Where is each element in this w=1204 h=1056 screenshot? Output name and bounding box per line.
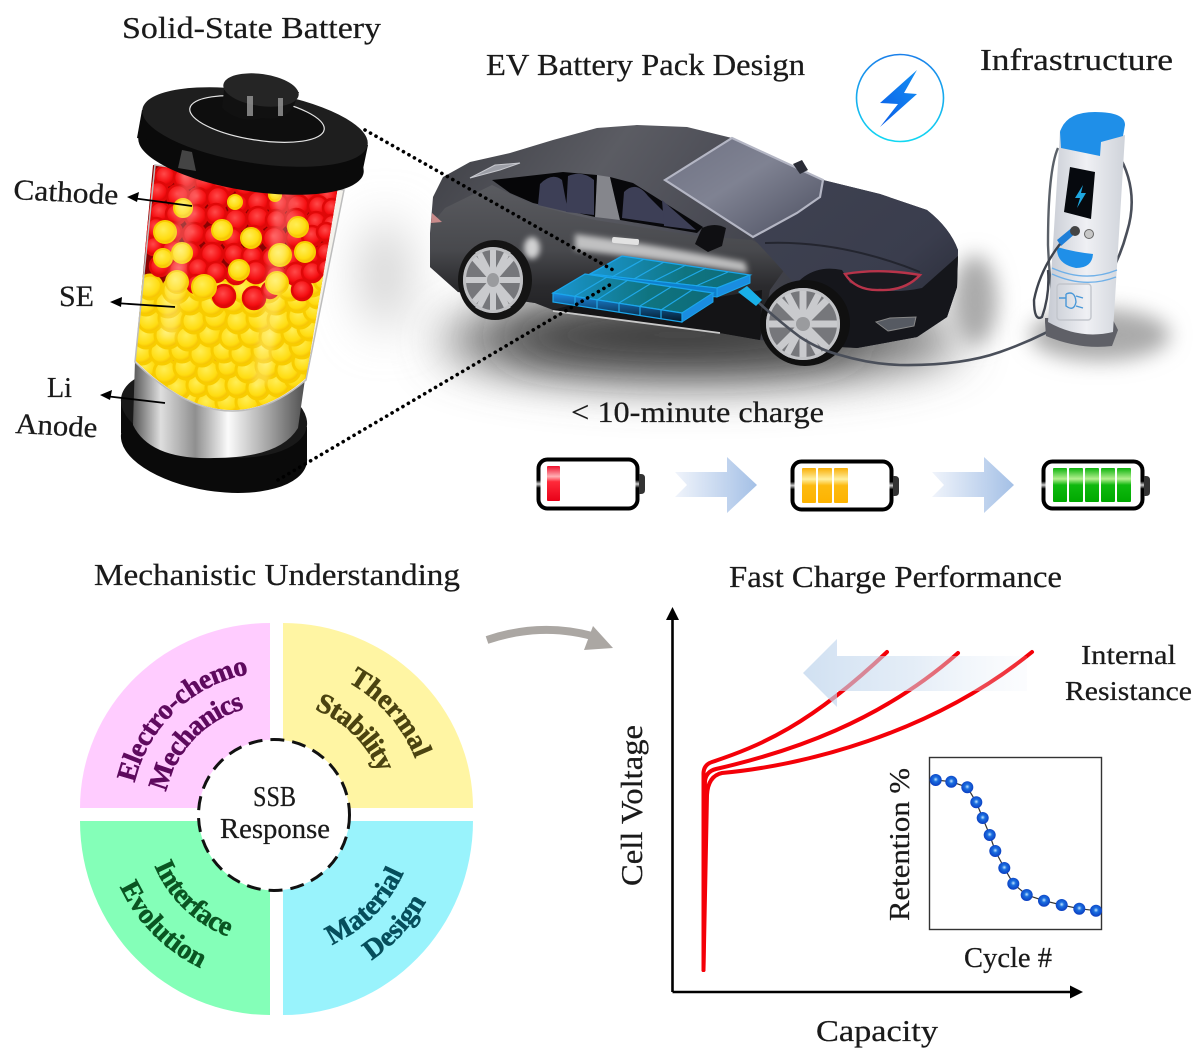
front wheel xyxy=(760,280,850,366)
hood and fender xyxy=(752,180,958,348)
bottom cap xyxy=(114,354,314,505)
label: cathode xyxy=(13,174,192,211)
front nose xyxy=(785,256,958,348)
solid electrolyte particles xyxy=(136,268,324,410)
dotted line: bottom zoom guide xyxy=(278,283,613,480)
headlight xyxy=(845,271,920,290)
B pillar xyxy=(595,175,620,220)
car silhouette and roof xyxy=(430,125,958,348)
inset chart: retention xyxy=(885,758,1102,974)
glass tube xyxy=(135,165,344,411)
title: EV battery pack design: EV Battery Pack Design xyxy=(486,47,806,82)
heading: fast charge performance: Fast Charge Performance xyxy=(729,559,1062,594)
segment: interface evolution xyxy=(80,821,270,1015)
chart axes xyxy=(666,607,1083,998)
icon: lightning badge xyxy=(856,54,944,142)
segment: material design: Design xyxy=(360,897,426,961)
label: Li anode: Li xyxy=(47,372,72,404)
door highlight xyxy=(575,234,748,273)
rear cable loop xyxy=(1048,148,1058,300)
icon: battery pack xyxy=(553,256,750,322)
lower door black panel xyxy=(553,290,762,340)
wing mirror xyxy=(695,225,726,252)
hood crease xyxy=(765,243,920,272)
icon: full battery xyxy=(1044,462,1150,508)
orange backing xyxy=(136,290,321,410)
seats xyxy=(538,174,696,230)
exposed electrolyte particles xyxy=(154,189,315,299)
arrow: SE xyxy=(110,297,175,307)
sill highlight xyxy=(553,311,720,333)
segment: material design: Material xyxy=(323,866,404,946)
front cable loop xyxy=(1034,244,1060,318)
label: SE xyxy=(59,280,175,313)
lower battery module xyxy=(553,274,713,322)
cathode active material particles xyxy=(145,166,341,309)
arrow: internal resistance xyxy=(803,639,1027,707)
rear deck window trim xyxy=(470,163,520,178)
screen xyxy=(1064,167,1095,219)
top cap xyxy=(133,74,373,208)
label: Li anode xyxy=(15,372,165,444)
inset x label: Cycle # xyxy=(964,943,1052,974)
segment: interface evolution: Interface xyxy=(154,858,232,936)
icon: electric car xyxy=(430,125,958,366)
station base xyxy=(1045,318,1118,347)
center: SSB response xyxy=(198,740,350,890)
lithium anode xyxy=(133,360,306,458)
windshield mirror xyxy=(793,160,808,174)
charging cable xyxy=(758,152,1132,365)
retention points xyxy=(930,774,1102,917)
upper battery module xyxy=(590,256,750,297)
glass highlights xyxy=(160,170,296,385)
label: Li anode: Anode xyxy=(15,408,98,444)
rear quarter highlight xyxy=(524,237,540,259)
segment: thermal stability xyxy=(283,623,473,808)
segment: electro-chemo mechanics: Mechanics xyxy=(148,697,243,792)
connector and controls xyxy=(1057,226,1094,246)
donut diagram: SSB response xyxy=(80,623,473,1015)
rear side window xyxy=(492,172,597,217)
label: internal resistance: Resistance xyxy=(1065,676,1192,706)
text: charge time: < 10-minute charge xyxy=(571,396,824,429)
heading: mechanistic understanding: Mechanistic Understanding xyxy=(94,557,460,592)
arrow: cathode xyxy=(127,192,192,206)
icon: cable connector at car xyxy=(738,286,762,306)
glass tube backing xyxy=(135,165,344,411)
icon: empty battery xyxy=(538,460,645,508)
icon: solid-state battery cell xyxy=(114,69,373,505)
fog lamp xyxy=(876,317,916,331)
segment: electro-chemo mechanics: Electro-chemo xyxy=(116,662,247,783)
icon: charging station xyxy=(1034,112,1125,347)
segment: thermal stability: Thermal xyxy=(351,666,433,759)
segment: interface evolution: Evolution xyxy=(120,878,204,968)
retention line xyxy=(936,780,1096,911)
y axis label: Cell Voltage xyxy=(614,725,649,886)
dotted line: top zoom guide xyxy=(365,130,613,270)
title: infrastructure: Infrastructure xyxy=(980,42,1173,77)
blue lower panel xyxy=(1057,247,1093,268)
chart: cell voltage vs capacity xyxy=(614,607,1192,1048)
background shadows xyxy=(363,220,1170,382)
icon: half battery xyxy=(792,462,899,510)
segment: thermal stability: Stability xyxy=(316,694,392,768)
center: SSB response: SSB xyxy=(253,782,296,813)
segment: material design xyxy=(283,821,473,1015)
arrow: Li anode xyxy=(100,390,165,403)
windshield xyxy=(665,138,823,237)
arrow: curved link xyxy=(487,626,613,650)
dark red backing xyxy=(140,160,345,290)
terminal post xyxy=(221,69,301,120)
station body xyxy=(1048,130,1125,334)
label: cathode: Cathode xyxy=(13,174,119,211)
title: solid-state battery: Solid-State Battery xyxy=(122,10,382,45)
blue top xyxy=(1060,112,1125,156)
tail light xyxy=(431,213,442,223)
blue stripes xyxy=(1052,268,1117,282)
label: internal resistance: Internal xyxy=(1081,640,1176,670)
electrode particles xyxy=(136,165,338,410)
label: SE: SE xyxy=(59,280,94,313)
door handle xyxy=(612,237,639,245)
side panel xyxy=(430,185,790,340)
rear wheel xyxy=(458,240,532,320)
segment: electro-chemo mechanics xyxy=(80,623,270,808)
label: internal resistance xyxy=(1065,640,1192,706)
plug emblem xyxy=(1057,284,1091,320)
arrow: charging step two xyxy=(932,457,1014,513)
arrow: charging step one xyxy=(675,457,757,513)
x axis label: Capacity xyxy=(816,1013,939,1048)
inset y label: Retention % xyxy=(885,768,916,921)
front side window xyxy=(610,177,703,233)
center: SSB response: Response xyxy=(220,814,330,845)
voltage curves xyxy=(703,652,1032,970)
